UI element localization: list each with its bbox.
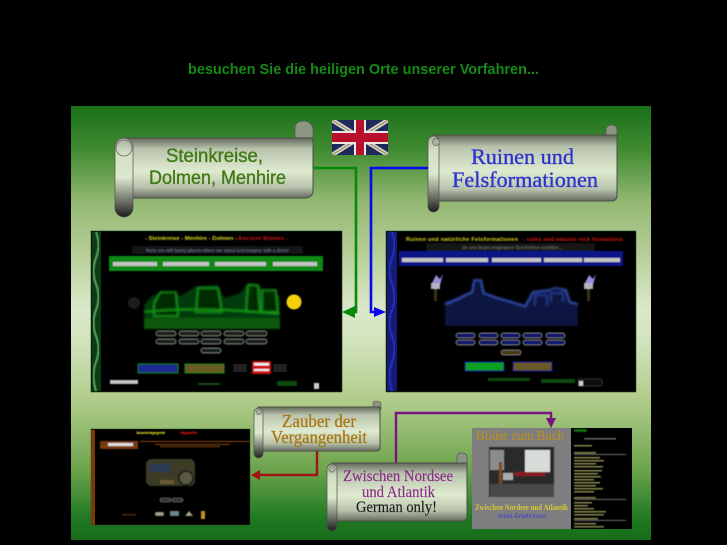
icon: torches: [431, 274, 596, 301]
panel: screenshot stone circles: there are still lonely places where we stand and imagine with a shiver: [146, 248, 289, 253]
heading: Steinkreise, Dolmen, Menhire: [149, 145, 286, 189]
footer: [110, 380, 138, 384]
panel: screenshot stone circles: [91, 231, 342, 392]
text: page heading: Ruinen und natürliche Felsformationen: [406, 237, 519, 243]
heading: Ruinen und Felsformationen: [452, 144, 598, 192]
stone circle picture: [144, 283, 280, 329]
link tiles: [465, 362, 504, 371]
heading: Steinkreise, Dolmen, Menhire: Dolmen, Menhire: [149, 167, 286, 189]
text: page heading: Zauber der Vergangenheit: [136, 431, 166, 435]
footer: [488, 378, 530, 381]
panel: screenshot ruins: [386, 231, 636, 392]
buttons: [160, 498, 171, 502]
text: Bilder zum Buch: Bilder zum Buch: [476, 428, 564, 443]
panel: green background: [71, 106, 651, 540]
icon: red bus: [252, 361, 271, 374]
heading: Zauber der Vergangenheit: [271, 411, 367, 447]
text: review column: [574, 429, 626, 528]
moon and sun: [128, 297, 140, 309]
arrow: green to stone circles page: [313, 168, 356, 318]
picture: [146, 459, 195, 486]
panel: screenshot magic of the past: Magic of the Past: [180, 431, 198, 435]
panel: screenshot stone circles: Ancient Stones -: [238, 236, 288, 242]
panel: scroll Zwischen Nordsee und Atlantik: [327, 453, 467, 531]
panel: screenshot magic of the past: [91, 429, 250, 525]
heading: Zwischen Nordsee und Atlantik, German only: German only!: [356, 499, 437, 516]
panel: screenshot book images: Insel-Erlebnisse: [498, 513, 547, 520]
form bar: [399, 251, 623, 266]
text: book title: Zwischen Nordsee und Atlantik: [475, 503, 568, 512]
heading: Steinkreise, Dolmen, Menhire: Steinkreise,: [166, 145, 263, 167]
heading: Zauber der Vergangenheit: Zauber der: [282, 411, 356, 431]
panel: scroll Zauber der Vergangenheit: [254, 401, 381, 458]
arrow: red to magic page: [251, 451, 317, 480]
photo: room: [489, 447, 554, 497]
panel: scroll Ruinen: [428, 125, 617, 212]
heading: Zwischen Nordsee und Atlantik, German only: und Atlantik: [362, 484, 435, 501]
heading: Ruinen und Felsformationen: Felsformationen: [452, 167, 598, 192]
form bar: [109, 256, 323, 271]
heading: Zwischen Nordsee und Atlantik, German only: [343, 468, 453, 516]
icon: union flag: [332, 120, 388, 155]
text: page heading: - Steinkreise - Menhire - Dolmen -: [145, 236, 237, 242]
heading: Zauber der Vergangenheit: Vergangenheit: [271, 427, 367, 447]
buttons: [156, 331, 267, 353]
link tiles: [138, 364, 178, 373]
ruins picture: [445, 280, 578, 326]
panel: scroll Steinkreise: [115, 121, 313, 217]
title: besuchen Sie die heiligen Orte unserer Vorfahren...: [188, 62, 539, 78]
arrow: blue to ruins page: [371, 168, 428, 317]
heading: Zwischen Nordsee und Atlantik, German only: Zwischen Nordsee: [343, 468, 453, 485]
buttons: [456, 333, 565, 355]
heading: Ruinen und Felsformationen: Ruinen und: [471, 144, 574, 169]
panel: screenshot ruins: die uns längst vergangene Geschichten erzählen...: [462, 245, 562, 250]
arrow: purple to book page: [396, 413, 556, 463]
panel: screenshot ruins: - ruins and natural rock formations: [523, 237, 623, 243]
panel: screenshot book images: [472, 428, 632, 529]
icons: [122, 514, 136, 516]
